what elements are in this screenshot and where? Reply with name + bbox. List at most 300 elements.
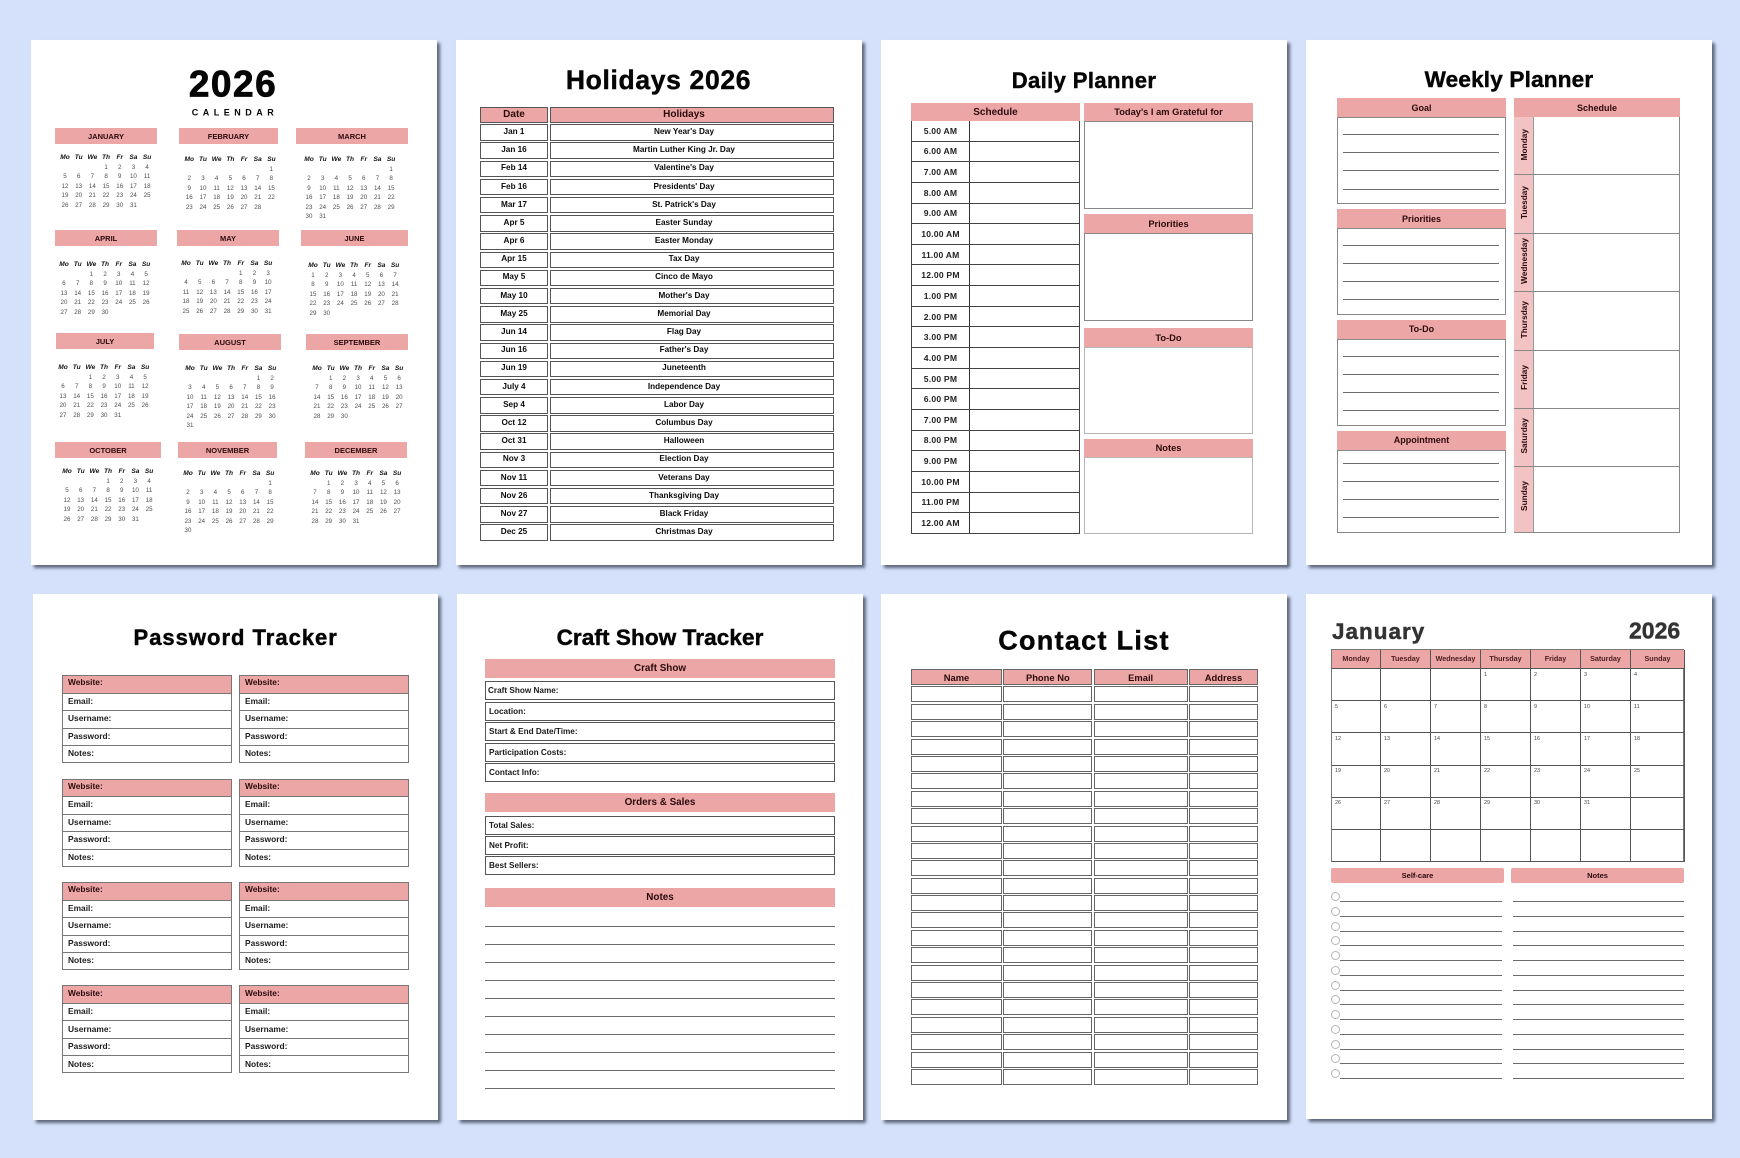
month: May: 16 [251, 288, 258, 296]
panel: week schedule: Monday [1518, 129, 1528, 160]
month: January: 16 [116, 182, 123, 190]
month: July: 14 [73, 392, 80, 400]
month: November: 8 [268, 489, 272, 496]
month: July: 29 [87, 412, 94, 418]
month: December: 27 [394, 508, 401, 515]
month: December: 15 [325, 498, 332, 506]
month: September: Fr [368, 364, 375, 372]
month: May: 15 [237, 288, 244, 296]
table: contacts: Phone No [1026, 672, 1070, 682]
month: June: 25 [351, 300, 357, 307]
table: contacts: Name [944, 672, 969, 682]
month: January: 25 [144, 192, 151, 199]
month: May: We [208, 260, 218, 266]
month: November: Su [266, 470, 274, 476]
month: October: 19 [64, 506, 70, 513]
title: Holidays 2026: Holidays 2026 [566, 65, 751, 95]
month: February: We [212, 156, 222, 162]
card: password entry 6: Username: [245, 920, 288, 930]
month: November: 17 [198, 508, 205, 515]
month: June: 6 [380, 272, 383, 278]
month: April: 19 [143, 290, 150, 296]
month: November: 7 [255, 489, 258, 496]
panel: notes: Notes [646, 892, 674, 903]
month: February: 22 [268, 194, 275, 201]
month: April: 9 [103, 280, 107, 287]
month: November: 10 [198, 498, 205, 506]
month: March: 14 [374, 184, 381, 192]
month: July: 21 [73, 402, 80, 409]
month: April: 10 [115, 280, 122, 287]
card: password entry 7: Website: [68, 988, 103, 998]
calendar grid: Sunday [1645, 654, 1670, 663]
month: April: 2 [103, 270, 107, 278]
calendar grid: Thursday [1489, 654, 1522, 663]
month: August: 20 [228, 403, 234, 410]
card: password entry 8: Website: [245, 988, 280, 998]
month: August: 4 [202, 384, 205, 391]
month: September: 5 [384, 374, 387, 382]
month: October: Su [145, 468, 153, 474]
month: June: 8 [311, 281, 315, 288]
month: September: 1 [329, 374, 332, 382]
month: March: Th [346, 156, 354, 162]
month: January: 23 [116, 192, 123, 199]
month: June: 17 [337, 290, 344, 298]
month: July: We [85, 364, 95, 370]
panel: schedule: 7.00 PM [924, 415, 957, 425]
month: July: Su [141, 364, 149, 370]
month: October: 7 [93, 487, 96, 494]
month: November: 23 [185, 518, 191, 524]
month: November: 15 [267, 498, 274, 506]
month: August: 15 [255, 394, 262, 400]
month: October: 3 [134, 478, 137, 484]
month: March: 22 [388, 194, 395, 201]
month: January [55, 128, 157, 208]
card: password entry 5: Username: [68, 920, 111, 930]
month: November: Th [225, 470, 233, 476]
page: weekly planner [1306, 40, 1712, 565]
month: January: 6 [77, 173, 80, 180]
month: October: 6 [79, 487, 82, 494]
month: December: 28 [312, 518, 318, 524]
month: March: 24 [319, 204, 326, 210]
panel: self-care checklist: Self-care [1402, 871, 1433, 880]
panel: schedule: 9.00 PM [924, 456, 957, 466]
month: June: Fr [364, 262, 371, 268]
panel: grateful: Today's I am Grateful for [1114, 107, 1223, 117]
month: November: We [210, 470, 220, 476]
page: contact list [881, 594, 1287, 1120]
month: July: 28 [73, 412, 80, 418]
card: password entry 2: Username: [245, 713, 288, 723]
title: Weekly Planner: Weekly Planner [1425, 67, 1593, 92]
month: June: 24 [337, 300, 344, 307]
month: January: 15 [103, 182, 109, 190]
panel: schedule: 5.00 AM [924, 126, 957, 136]
month: May: 24 [265, 298, 272, 305]
title: 2026: 2026 [189, 64, 277, 104]
panel: orders and sales: Net Profit: [489, 841, 529, 850]
month: July: 20 [60, 402, 66, 409]
month: November: 12 [226, 498, 232, 506]
panel: schedule: 8.00 AM [924, 188, 957, 198]
month: November: 26 [226, 518, 232, 524]
month: June: 29 [310, 310, 316, 316]
month: March: 2 [307, 175, 311, 182]
panel: to-do: To-Do [1409, 324, 1434, 334]
table: holidays list: May 10 [500, 291, 528, 300]
panel: schedule: Schedule [973, 106, 1018, 118]
month: October: 4 [147, 478, 151, 484]
month: November: 14 [253, 498, 260, 506]
card: password entry 1: Website: [68, 677, 103, 687]
month: June: 18 [351, 290, 357, 298]
subtitle: calendar: CALENDAR [192, 108, 278, 118]
month: December: 5 [382, 480, 385, 486]
calendar grid: 26 [1335, 800, 1341, 806]
card: password entry 2: Email: [245, 696, 270, 706]
month: January: 20 [75, 192, 82, 199]
calendar grid: 9 [1534, 704, 1537, 710]
month: June: 20 [378, 290, 385, 298]
table: holidays list: Jun 14 [501, 327, 527, 336]
month: May: 28 [224, 308, 230, 314]
month: July: 13 [60, 392, 66, 400]
month: May: 30 [251, 308, 258, 314]
month: November: 30 [185, 527, 191, 534]
month: January: 17 [130, 182, 137, 190]
month: April: 5 [144, 270, 148, 278]
month: October: Sa [131, 468, 139, 474]
panel: schedule [911, 103, 1080, 534]
month: March: 23 [306, 204, 312, 210]
card: password entry 8: Notes: [245, 1059, 271, 1069]
month: July: 11 [128, 383, 135, 390]
panel: week schedule [1514, 98, 1680, 533]
calendar grid: 15 [1484, 736, 1490, 742]
month: May: Su [264, 260, 272, 266]
month: October: 26 [64, 516, 70, 522]
table: holidays list: Apr 6 [504, 236, 524, 245]
panel: goal [1337, 98, 1506, 204]
month: March: 30 [306, 213, 312, 220]
month: February: 2 [188, 175, 191, 182]
panel: grateful [1084, 103, 1253, 209]
month: December: 19 [380, 498, 387, 506]
month: July: 7 [75, 383, 78, 390]
table: holidays list: Flag Day [667, 327, 701, 336]
month: July: 8 [89, 383, 92, 390]
month: April: APRIL [95, 234, 117, 242]
panel: week schedule: Schedule [1577, 102, 1617, 112]
table: holidays list: Jan 1 [504, 127, 524, 136]
month: August: 29 [255, 412, 262, 420]
card: password entry 3: Username: [68, 817, 111, 827]
month: December: 29 [325, 518, 332, 524]
month: March: 15 [388, 184, 395, 192]
month: February: 1 [270, 166, 273, 172]
month: November: 24 [198, 518, 205, 524]
month: December [305, 442, 407, 524]
card: password entry 7: Username: [68, 1024, 111, 1034]
calendar grid: 16 [1534, 736, 1540, 742]
card: password entry 3: Website: [68, 781, 103, 791]
heading: 2026: 2026 [1629, 618, 1680, 644]
calendar grid: 18 [1634, 736, 1640, 742]
panel: goal: Goal [1411, 102, 1432, 112]
panel: priorities [1084, 214, 1253, 321]
month: August: 14 [241, 394, 248, 400]
month: March: 28 [374, 204, 381, 210]
table: holidays list: New Year's Day [654, 127, 714, 136]
panel: schedule: 1.00 PM [924, 291, 957, 301]
page: holidays 2026 [456, 40, 862, 565]
panel: craft show: Craft Show Name: [488, 686, 559, 695]
month: September: 19 [382, 394, 389, 400]
month: August: Tu [200, 364, 208, 372]
month: March: 19 [347, 194, 353, 201]
month: May: 8 [239, 279, 242, 286]
month: March: Fr [360, 156, 367, 162]
month: February: 7 [256, 175, 259, 182]
month: April: 15 [88, 290, 95, 296]
month: October: 17 [132, 496, 139, 504]
month: December: 17 [353, 498, 359, 506]
panel: notes [1084, 439, 1253, 534]
month: June: 22 [310, 300, 316, 307]
month: July: 25 [128, 402, 135, 409]
table: holidays list: July 4 [502, 382, 526, 391]
card: password entry 8: Email: [245, 1006, 270, 1016]
month: April: 13 [61, 290, 67, 296]
month: April: 29 [88, 308, 95, 316]
table: holidays list: Valentine's Day [654, 163, 714, 172]
month: September: Th [354, 364, 362, 372]
month: October: 21 [91, 506, 98, 513]
calendar grid: 24 [1584, 768, 1590, 774]
month: March: 25 [333, 204, 340, 210]
month: March: 18 [333, 194, 340, 201]
month: November: 1 [268, 480, 272, 486]
month: November: 16 [185, 508, 191, 515]
table: holidays list: Labor Day [664, 400, 704, 409]
month: July: 31 [114, 412, 121, 418]
month: November: 25 [212, 518, 219, 524]
table: holidays list: Mar 17 [501, 200, 527, 209]
month: December: 23 [339, 508, 346, 515]
month: November: 5 [227, 489, 231, 496]
month: November: 18 [212, 508, 219, 515]
month: April: 24 [115, 299, 122, 306]
card: password entry 2: Password: [245, 731, 287, 741]
month: February: 3 [201, 175, 205, 182]
month: December: 22 [325, 508, 332, 515]
month: December: 12 [380, 489, 387, 496]
month: January: Mo [60, 154, 70, 160]
card: password entry 7 [62, 985, 232, 1073]
panel: week schedule: Thursday [1518, 301, 1528, 338]
month: August: 18 [200, 403, 207, 410]
month: August: Mo [185, 364, 195, 372]
month: May: 5 [198, 279, 201, 286]
month: August: We [212, 364, 222, 372]
month: September: 4 [370, 374, 373, 382]
month: September: 3 [356, 374, 360, 382]
month: July: 3 [116, 374, 119, 380]
month: April: 25 [129, 299, 136, 306]
month: May: 31 [265, 308, 272, 314]
panel: notes lines: Notes [1587, 871, 1608, 880]
month: October: 5 [65, 487, 69, 494]
card: password entry 1: Password: [68, 731, 110, 741]
month: April: 23 [102, 299, 108, 306]
month: October: 18 [146, 496, 153, 504]
calendar grid: Wednesday [1436, 654, 1475, 663]
month: August: 28 [241, 412, 248, 420]
month: September: 17 [355, 394, 361, 400]
month: October [55, 442, 161, 522]
month: March: 31 [319, 213, 326, 220]
card: password entry 2 [239, 675, 409, 763]
month: June: Mo [308, 262, 318, 268]
month: March [296, 128, 408, 220]
month: September: 24 [355, 403, 361, 410]
card: password entry 1 [62, 675, 232, 763]
month: September: Su [395, 364, 403, 372]
month: October: 22 [105, 506, 111, 513]
month: November: 28 [253, 518, 260, 524]
month: February: 5 [229, 175, 232, 182]
panel: priorities [1337, 209, 1506, 315]
month: October: 27 [77, 516, 84, 522]
title: Password Tracker: Password Tracker [134, 625, 338, 650]
month: April: 1 [90, 270, 93, 278]
panel: week schedule: Sunday [1518, 481, 1528, 511]
month: October: OCTOBER [89, 446, 127, 454]
card: password entry 4: Email: [245, 799, 270, 809]
month: July: JULY [96, 336, 114, 346]
month: August: Su [268, 364, 276, 372]
month: December: Tu [325, 470, 333, 476]
month: April: 17 [115, 290, 122, 296]
panel: schedule: 4.00 PM [924, 353, 957, 363]
month: February: FEBRUARY [208, 132, 249, 140]
month: August: 25 [200, 412, 207, 420]
table: holidays list: May 25 [500, 309, 528, 318]
month: October: 1 [106, 478, 110, 484]
month: May: 2 [253, 270, 256, 276]
month: February: 14 [254, 184, 261, 192]
month: July: 10 [114, 383, 121, 390]
month: April: We [86, 260, 96, 268]
table: holidays list: Jan 16 [501, 145, 527, 154]
page: password tracker [33, 594, 438, 1120]
month: September: 16 [341, 394, 348, 400]
month: September: 25 [368, 403, 375, 410]
month: March: 3 [321, 175, 324, 182]
panel: craft show: Location: [489, 707, 526, 716]
panel: orders and sales: Best Sellers: [489, 861, 539, 870]
panel: schedule: 7.00 AM [924, 167, 957, 177]
month: March: 5 [348, 175, 352, 182]
month: October: 25 [146, 506, 153, 513]
card: password entry 6: Website: [245, 884, 280, 894]
card: password entry 6: Email: [245, 903, 270, 913]
month: July: 5 [143, 374, 147, 380]
calendar grid: 13 [1384, 736, 1390, 742]
card: password entry 5 [62, 882, 232, 970]
month: March: MARCH [338, 132, 366, 140]
month: November: 11 [212, 498, 219, 506]
month: March: Tu [319, 156, 327, 162]
table: holidays list: Election Day [659, 454, 709, 463]
month: December: 3 [354, 480, 358, 486]
month: January: Sa [129, 154, 137, 160]
panel: week schedule: Tuesday [1518, 186, 1528, 219]
month: July: 17 [114, 392, 121, 400]
month: January: 14 [89, 182, 96, 190]
table: contacts: Email [1128, 672, 1153, 682]
month: May: 11 [183, 288, 189, 296]
month: May: 14 [224, 288, 230, 296]
month: January: Fr [116, 154, 123, 160]
month: December: 6 [395, 480, 399, 486]
card: password entry 8: Password: [245, 1041, 287, 1051]
month: September: 12 [382, 384, 389, 391]
table: holidays list: Nov 26 [501, 491, 527, 500]
month: June: 7 [393, 272, 397, 278]
month: February: 12 [227, 184, 234, 192]
month: May: 9 [253, 279, 256, 286]
month: April: 16 [102, 290, 108, 296]
month: June: 9 [325, 281, 328, 288]
month: January: 11 [144, 173, 150, 180]
month: August: 11 [200, 394, 207, 400]
month: December: Sa [379, 470, 387, 476]
month: January: 5 [63, 173, 67, 180]
month: June: 10 [337, 281, 344, 288]
table: holidays list: Sep 4 [503, 400, 525, 409]
month: April: 3 [117, 270, 120, 278]
table: holidays list: Holidays [663, 109, 705, 120]
calendar grid: 25 [1634, 768, 1640, 774]
card: password entry 3 [62, 778, 232, 866]
month: November: 22 [267, 508, 274, 515]
month: December: 31 [353, 518, 359, 524]
month: January: Tu [75, 154, 83, 160]
panel: schedule: 6.00 PM [924, 394, 957, 404]
card: password entry 7: Notes: [68, 1059, 94, 1069]
month: June: 14 [392, 281, 399, 288]
card: password entry 5: Email: [68, 903, 93, 913]
month: May: 20 [210, 298, 217, 305]
month: September: 26 [382, 403, 389, 410]
month: September: 6 [397, 374, 401, 382]
month: March: 13 [360, 184, 367, 192]
month: May [177, 230, 279, 314]
month: January: 21 [89, 192, 96, 199]
month: May: 4 [184, 279, 188, 286]
month: April [55, 230, 157, 316]
calendar grid: 5 [1335, 704, 1338, 710]
month: January: We [87, 154, 97, 160]
month: May: 27 [210, 308, 217, 314]
month: June: 21 [392, 290, 399, 298]
month: November: Fr [239, 470, 246, 476]
table: holidays list: Nov 27 [501, 509, 527, 518]
